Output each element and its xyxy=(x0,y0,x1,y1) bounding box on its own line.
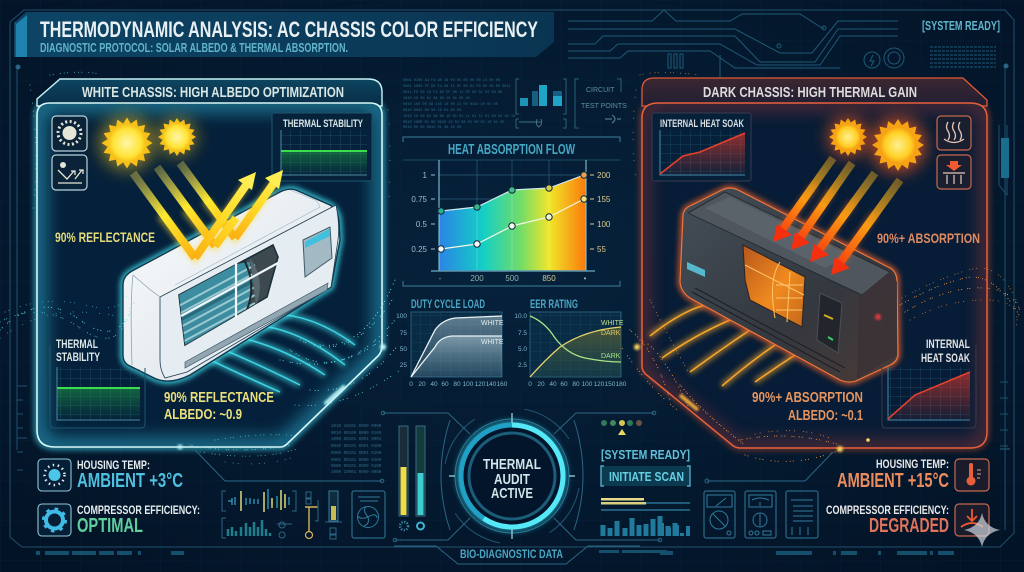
callout: reflectance and albedo: 90% REFLECTANCE xyxy=(164,390,274,406)
airflow streams xyxy=(200,314,355,392)
chart title: HEAT ABSORPTION FLOW xyxy=(448,142,575,158)
indicator xyxy=(687,262,705,277)
circuit test points module: CIRCUIT xyxy=(586,87,615,94)
stat: housing temp white: AMBIENT +3°C xyxy=(77,470,183,492)
chart: eer rating: 60 xyxy=(560,381,568,388)
sun large xyxy=(870,117,926,173)
mini chart: lower thermal stability: STABILITY xyxy=(56,350,100,364)
mini chart: thermal stability xyxy=(272,113,372,181)
gauge: thermal audit active: THERMAL xyxy=(483,456,541,473)
mini chart: lower internal heat soak: HEAT SOAK xyxy=(921,351,970,365)
heading: DARK CHASSIS: HIGH THERMAL GAIN xyxy=(703,84,917,101)
stat: compressor dark xyxy=(826,503,989,537)
panel: dark chassis xyxy=(642,78,987,448)
decorative data text: 0001 0100 A3 F4 90 16 F0 0E 00 00 00 14 00 00 xyxy=(403,79,500,83)
icon: heat absorb xyxy=(937,155,971,189)
mini chart: lower thermal stability xyxy=(50,337,145,428)
chart: duty cycle load: WHITE xyxy=(481,339,504,346)
icon: sun xyxy=(52,116,87,151)
chart: eer rating: WHITE xyxy=(601,320,624,327)
chart: duty cycle load: 100 xyxy=(463,381,474,388)
decorative data text: 1010 10 00 01 0A 00 10 01 00 45 xyxy=(403,97,470,101)
header panel xyxy=(15,12,554,57)
heading: WHITE CHASSIS: HIGH ALBEDO OPTIMIZATION xyxy=(82,84,344,101)
stat: housing temp dark: AMBIENT +15°C xyxy=(837,470,949,492)
chart: eer rating: 7.5 xyxy=(518,330,527,337)
gauge: thermal audit active: ACTIVE xyxy=(491,485,533,502)
left axis: 1 xyxy=(423,171,428,180)
bottom label: bio-diagnostic data: BIO-DIAGNOSTIC DATA xyxy=(460,549,563,561)
status dots xyxy=(601,420,642,435)
mini chart: lower thermal stability: THERMAL xyxy=(56,337,98,351)
decorative data text: 0010 0001 00 00 10 01 00 00 xyxy=(403,109,461,113)
mini chart: internal heat soak xyxy=(652,113,751,181)
decorative data text xyxy=(403,79,515,130)
gradient area xyxy=(439,174,586,271)
right axis: 55 xyxy=(597,245,606,254)
reflected sun rays xyxy=(133,163,283,258)
decorative data text: 0001 1000 FF 80 F4 00 11 0F 00 01 F0 00 00 00 0011 xyxy=(403,85,511,89)
chart: eer rating: EER RATING xyxy=(530,299,578,311)
chart: eer rating: 2.5 xyxy=(518,362,527,369)
circuit test points module xyxy=(575,79,627,128)
top right status xyxy=(922,18,1000,67)
chart: eer rating: 5.0 xyxy=(518,346,527,353)
right axis xyxy=(590,171,611,254)
right axis: 200 xyxy=(597,171,611,180)
chart: eer rating: 10.0 xyxy=(514,313,527,320)
left axis xyxy=(411,171,435,254)
chart: duty cycle load: 0 xyxy=(409,381,413,388)
instrument: multimeter xyxy=(745,491,776,538)
stat: compressor white xyxy=(38,503,200,537)
panel outline xyxy=(642,103,987,448)
particles: white side xyxy=(0,72,400,464)
bottom axis: 500 xyxy=(505,274,519,283)
bottom axis xyxy=(439,274,587,283)
chart: duty cycle load: 60 xyxy=(441,381,449,388)
ac vent xyxy=(185,283,328,368)
gauge: thermal audit active xyxy=(441,408,583,544)
binary block: 1010 10101 0000 0000 xyxy=(331,425,382,429)
panel tab xyxy=(642,78,987,106)
module: valve and gauge xyxy=(305,491,342,539)
front face xyxy=(160,205,339,378)
ac display xyxy=(303,227,332,277)
panel outline xyxy=(37,103,382,447)
mini chart: lower internal heat soak xyxy=(882,337,976,428)
panel frame glow xyxy=(37,103,382,447)
panel tab xyxy=(37,79,382,106)
icon: heat waves xyxy=(937,116,971,150)
bottom axis: • xyxy=(584,274,587,283)
right axis: 100 xyxy=(597,220,611,229)
chart: eer rating: 180 xyxy=(616,381,627,388)
binary block: 0000 00101 0001 0100 xyxy=(331,452,382,456)
mini bar module xyxy=(516,79,566,128)
dark ac unit xyxy=(680,188,898,382)
chart: duty cycle load: 20 xyxy=(418,381,426,388)
sun small xyxy=(828,117,868,157)
subtitle: DIAGNOSTIC PROTOCOL: SOLAR ALBEDO & THERMAL ABSORPTION. xyxy=(40,41,348,55)
callout: absorption and albedo: ALBEDO: ~0.1 xyxy=(788,408,863,424)
panel frame glow xyxy=(642,103,987,448)
chart: duty cycle load xyxy=(396,299,508,388)
binary block: 0000 00101 0000 0100 xyxy=(331,465,382,469)
chart: eer rating: DARK xyxy=(601,330,621,337)
button: initiate scan xyxy=(601,466,690,486)
airflow streams xyxy=(650,305,795,386)
module: fan xyxy=(352,491,385,538)
stat: compressor white: COMPRESSOR EFFICIENCY: xyxy=(77,503,200,517)
stat: housing temp white: HOUSING TEMP: xyxy=(77,458,150,472)
absorbed sun rays xyxy=(773,158,900,275)
chart gridlines xyxy=(439,160,586,271)
window louvers xyxy=(175,258,260,346)
stat: compressor dark: COMPRESSOR EFFICIENCY: xyxy=(826,503,949,517)
gauge: thermal audit active: AUDIT xyxy=(494,471,530,488)
callout: absorption and albedo xyxy=(752,390,863,424)
chart: duty cycle load: 80 xyxy=(453,381,461,388)
stat: housing temp dark: HOUSING TEMP: xyxy=(876,457,949,471)
top series xyxy=(438,172,587,214)
chart: eer rating: 100 xyxy=(582,381,593,388)
system ready label: [SYSTEM READY] xyxy=(601,447,690,462)
callout: reflectance and albedo xyxy=(164,390,274,423)
callout: reflectance and albedo: ALBEDO: ~0.9 xyxy=(164,407,242,423)
right axis: 155 xyxy=(597,195,611,204)
binary block: 1000 00101 0001 0001 xyxy=(331,438,382,442)
watermark star xyxy=(964,513,1000,547)
chart: eer rating: DARK xyxy=(601,353,621,360)
chart: heat absorption flow xyxy=(403,137,620,286)
instrument: analog meter xyxy=(704,491,735,538)
callout: absorption and albedo: 90%+ ABSORPTION xyxy=(752,390,863,406)
control panel xyxy=(817,293,842,353)
bottom axis: - xyxy=(439,274,442,283)
chart: eer rating xyxy=(514,299,627,388)
bottom axis: 200 xyxy=(470,274,484,283)
chart: eer rating: 120 xyxy=(594,381,605,388)
label: reflectance: 90% REFLECTANCE xyxy=(55,229,155,245)
chart: eer rating: 80 xyxy=(572,381,580,388)
left axis: 0.25 xyxy=(411,245,428,254)
ac window orange xyxy=(743,245,805,327)
icon: reflection xyxy=(52,155,87,190)
mini chart: lower internal heat soak: INTERNAL xyxy=(926,337,970,351)
chart: eer rating: 150 xyxy=(605,381,616,388)
panel body xyxy=(642,103,987,448)
bottom axis: 850 xyxy=(542,274,556,283)
chart: duty cycle load: DUTY CYCLE LOAD xyxy=(411,299,485,311)
chart: duty cycle load: 140 xyxy=(486,381,497,388)
panel: white chassis xyxy=(37,79,382,447)
sun small xyxy=(157,117,197,157)
white ac unit xyxy=(123,189,340,381)
sun large xyxy=(99,115,155,171)
chart: duty cycle load: WHITE xyxy=(481,320,504,327)
level bars xyxy=(399,426,425,530)
left axis: 0.75 xyxy=(411,195,428,204)
progress stripes and bar chart xyxy=(599,498,690,553)
chart: duty cycle load: 40 xyxy=(430,381,438,388)
panel inner glow xyxy=(642,103,987,448)
binary block: 0010 00100 0000 0100 xyxy=(331,432,382,436)
title: THERMODYNAMIC ANALYSIS: AC CHASSIS COLOR EFFICIENCY xyxy=(40,17,538,42)
connector lines xyxy=(195,411,1010,542)
glow accents on dark panel edge xyxy=(634,344,870,452)
decorative data text: 1010 10 00 01 0A 00 10 01 01 11 01 11 01 00 01 10 10 xyxy=(403,115,515,119)
mini chart: thermal stability: THERMAL STABILITY xyxy=(283,118,363,130)
chart: eer rating: 0 xyxy=(528,381,532,388)
chart: duty cycle load: 50 xyxy=(400,346,407,353)
binary block: 0010 00101 0001 0100 xyxy=(331,445,382,449)
chart: duty cycle load: 25 xyxy=(400,362,407,369)
glow accents on white panel edge xyxy=(178,344,386,450)
panel inner glow xyxy=(37,103,382,447)
decorative data text: 0010 00 00 0010 01 0A 10 00 xyxy=(403,126,461,130)
chart: duty cycle load: 100 xyxy=(396,313,407,320)
chart: eer rating: 20 xyxy=(537,381,545,388)
binary block: 1000 10001 0000 0000 xyxy=(331,471,382,475)
chart: eer rating: 40 xyxy=(549,381,557,388)
chart: duty cycle load: 120 xyxy=(475,381,486,388)
chart: duty cycle load: 160 xyxy=(497,381,508,388)
circuit traces xyxy=(568,10,904,80)
decorative data text: 0010 100 00 0A 140 10 00 21 00 0102 10 04 05 xyxy=(403,103,498,107)
button: initiate scan: INITIATE SCAN xyxy=(609,469,684,484)
circuit test points module: TEST POINTS xyxy=(581,103,627,110)
left axis: 0.5 xyxy=(416,220,428,229)
tiny data lines xyxy=(930,47,996,67)
top face xyxy=(688,192,890,295)
panel body xyxy=(37,103,382,447)
chart: duty cycle load: 75 xyxy=(400,330,407,337)
bottom series xyxy=(438,196,587,252)
module: waveform and small bars xyxy=(222,489,296,538)
decorative data text: 0010 1000 01 0A 0010 10 01 0A 01 00 01 10 01 00 xyxy=(403,121,504,125)
stat: compressor white: OPTIMAL xyxy=(77,515,143,537)
ac window xyxy=(179,245,278,345)
stat: compressor dark: DEGRADED xyxy=(869,515,949,537)
bottom label: bio-diagnostic data xyxy=(394,546,640,564)
stat: housing temp dark xyxy=(837,457,989,492)
instrument: spec sheet xyxy=(786,491,818,538)
decorative data text: 0011 F0 00 10 F4 00 5F 00 11 0F 00 01 F0 00 00 xyxy=(403,91,502,95)
mini chart: internal heat soak: INTERNAL HEAT SOAK xyxy=(660,118,744,130)
binary block xyxy=(331,425,382,475)
label: absorption: 90%+ ABSORPTION xyxy=(877,230,980,246)
particles: dark side xyxy=(620,72,1022,461)
stat: housing temp white xyxy=(38,458,183,492)
binary block: 0001 00101 0000 0100 xyxy=(331,459,382,463)
